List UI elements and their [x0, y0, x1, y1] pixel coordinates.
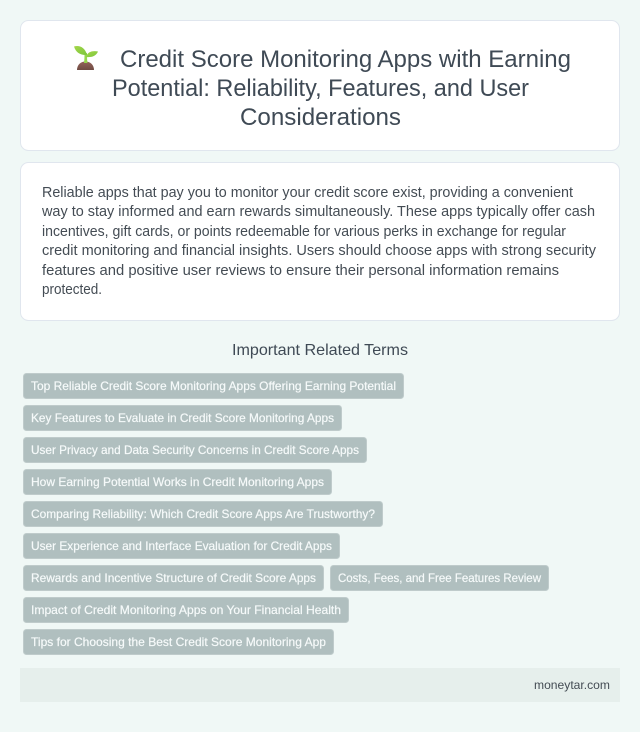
- tag 1: [24, 374, 404, 398]
- tag 1: Top Reliable Credit Score Monitoring Apps Offering Earning Potential: [31, 379, 396, 393]
- tag 9: [24, 598, 348, 622]
- summary text: features and positive user reviews to ensure their personal information remains: [42, 263, 559, 279]
- tag list: [24, 374, 548, 654]
- summary text: way to stay informed and earn rewards simultaneously. These apps typically offer cash: [41, 204, 595, 220]
- summary text: Reliable apps that pay you to monitor your credit score exist, providing a convenient: [42, 185, 573, 201]
- tag 6: User Experience and Interface Evaluation for Credit Apps: [31, 539, 332, 553]
- title text: [112, 46, 571, 131]
- summary text: credit monitoring and financial insights. Users should choose apps with strong security: [42, 243, 597, 259]
- tag 5: [24, 502, 382, 526]
- tag 4: How Earning Potential Works in Credit Monitoring Apps: [31, 475, 324, 489]
- footer: moneytar.com: [534, 678, 610, 692]
- summary text: incentives, gift cards, or points redeemable for various perks in exchange for regular: [42, 224, 566, 240]
- tag 8: Costs, Fees, and Free Features Review: [338, 571, 541, 585]
- tag 2: [24, 406, 342, 430]
- title text: Potential: Reliability, Features, and User: [112, 75, 529, 102]
- tag 5: Comparing Reliability: Which Credit Score Apps Are Trustworthy?: [31, 507, 375, 521]
- tag 10: Tips for Choosing the Best Credit Score Monitoring App: [31, 635, 326, 649]
- tag 3: [24, 438, 366, 462]
- tag 7: Rewards and Incentive Structure of Credit Score Apps: [31, 571, 316, 585]
- tag 7: [24, 566, 324, 590]
- tag 9: Impact of Credit Monitoring Apps on Your Financial Health: [31, 603, 341, 617]
- summary text: protected.: [42, 282, 102, 298]
- heading: related terms: Important Related Terms: [232, 342, 408, 359]
- tag 2: Key Features to Evaluate in Credit Score Monitoring Apps: [31, 411, 334, 425]
- tag 8: [330, 566, 548, 590]
- panel: summary: [20, 162, 620, 320]
- tag 3: User Privacy and Data Security Concerns in Credit Score Apps: [31, 443, 359, 457]
- title text: Considerations: [240, 104, 401, 131]
- icon: sprout: [74, 46, 98, 70]
- summary text: [41, 185, 597, 298]
- tag 6: [24, 534, 340, 558]
- footer: [20, 668, 620, 702]
- tag 4: [24, 470, 332, 494]
- tag 10: [24, 630, 334, 654]
- panel: title: [20, 20, 620, 150]
- title text: Credit Score Monitoring Apps with Earning: [120, 46, 571, 73]
